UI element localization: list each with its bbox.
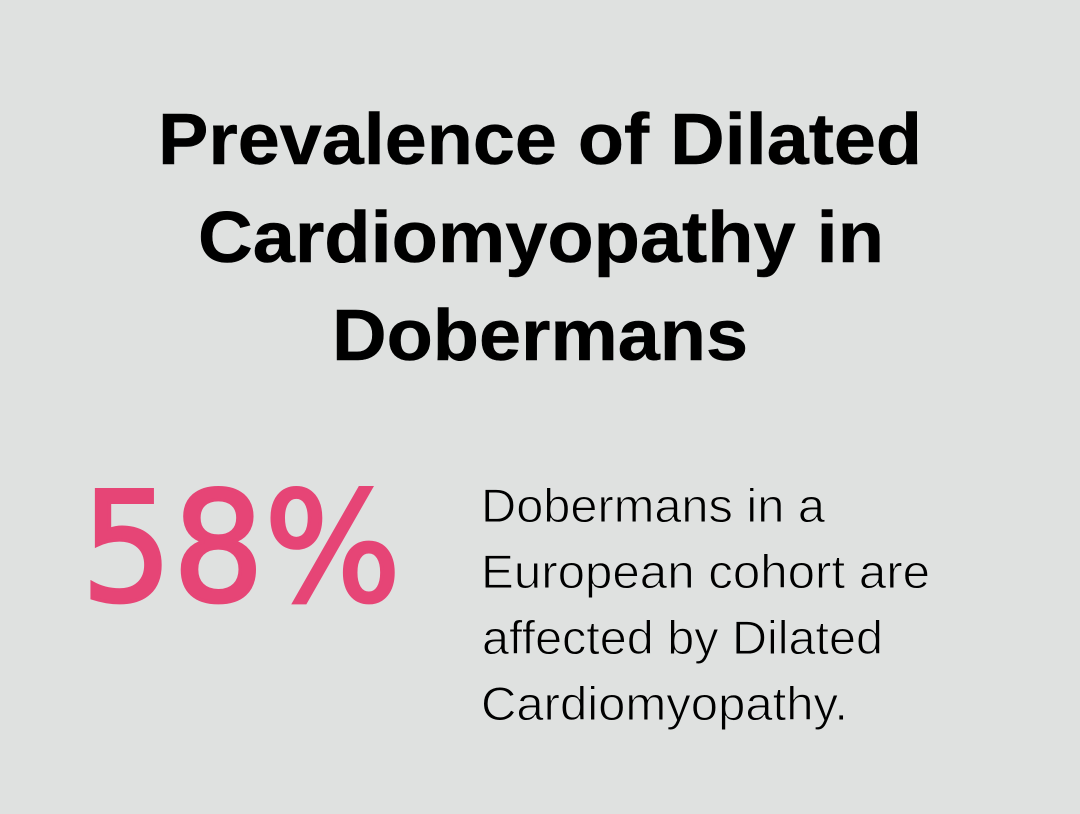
title: Prevalence of Dilated bbox=[158, 100, 922, 180]
description text: affected by Dilated bbox=[482, 611, 883, 664]
title: Dobermans bbox=[332, 296, 748, 376]
description text bbox=[481, 479, 930, 730]
title: Cardiomyopathy in bbox=[198, 198, 884, 278]
description text: Cardiomyopathy. bbox=[481, 677, 848, 730]
statistic: 58%: 58% bbox=[81, 460, 401, 636]
title bbox=[158, 100, 922, 376]
description text: European cohort are bbox=[481, 545, 930, 598]
description text: Dobermans in a bbox=[481, 479, 826, 532]
